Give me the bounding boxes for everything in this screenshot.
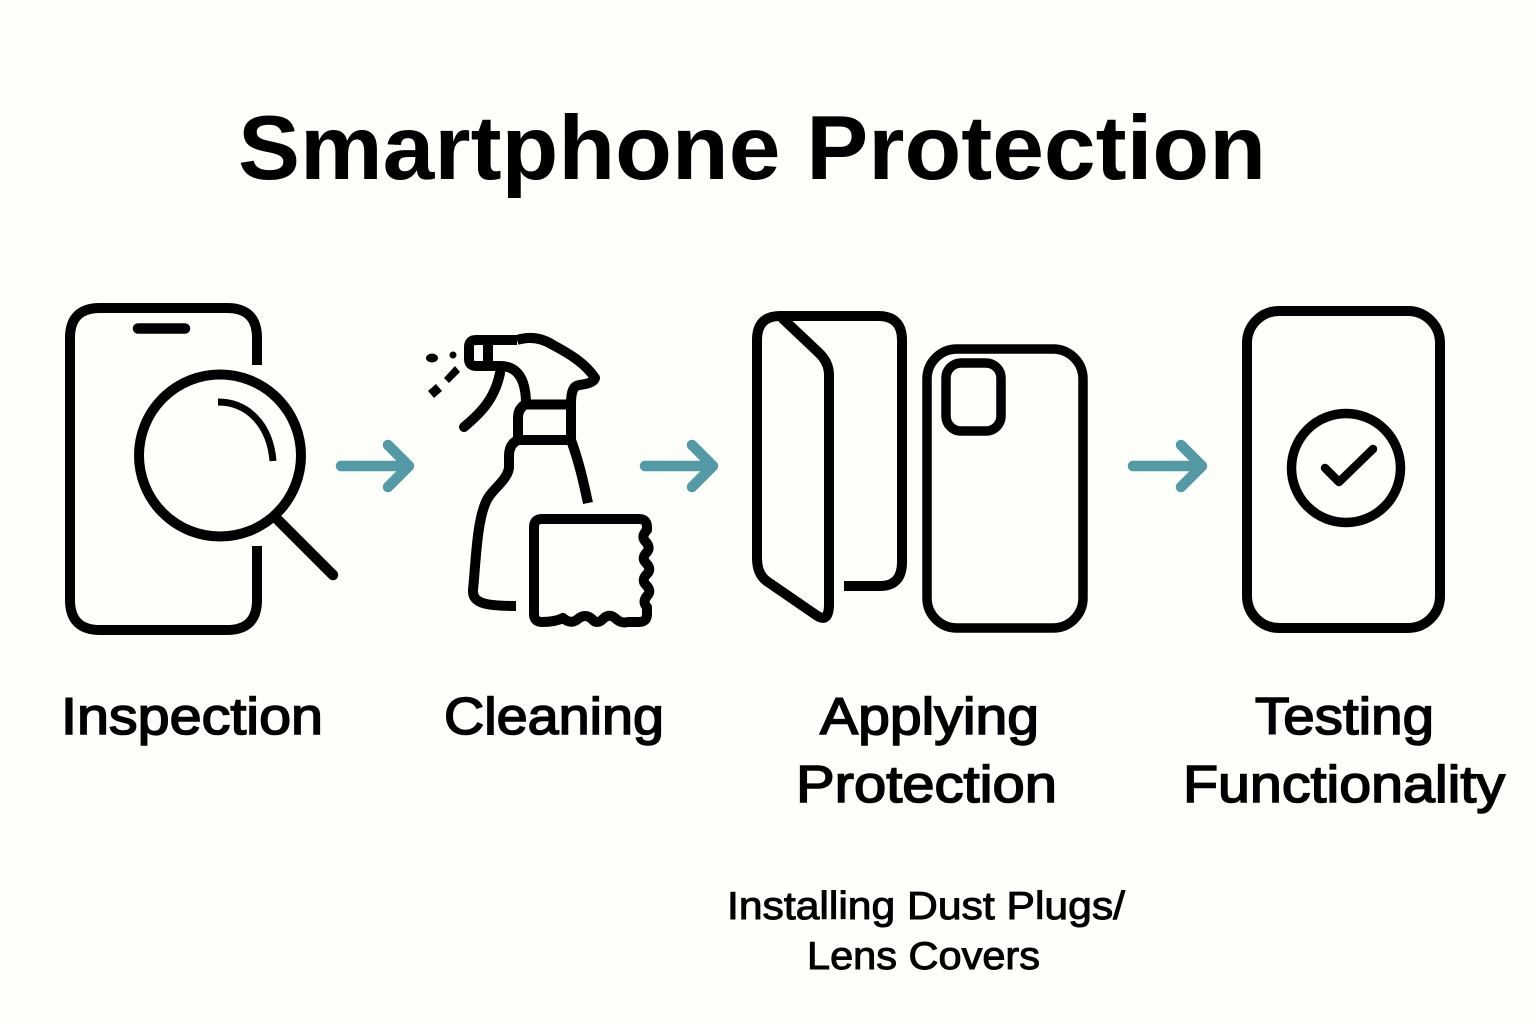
label: inspection: Inspection	[61, 688, 323, 746]
icon: phone with check mark (testing)	[1247, 311, 1440, 628]
label: testing functionality: Functionality	[1183, 756, 1505, 814]
label: testing functionality	[1183, 688, 1505, 814]
label: applying protection	[796, 688, 1057, 814]
title: Smartphone Protection	[238, 98, 1266, 199]
label: applying protection: Protection	[796, 756, 1057, 814]
label: applying protection: Applying	[820, 688, 1039, 746]
icon: spray bottle and cloth (cleaning)	[426, 338, 649, 622]
icon: phone with magnifying glass (inspection)	[70, 308, 333, 630]
label: cleaning: Cleaning	[444, 688, 664, 746]
arrow: applying protection to testing	[1133, 445, 1202, 487]
label: testing functionality: Testing	[1255, 688, 1434, 746]
icon: folio cover and phone case (applying protection)	[757, 316, 1083, 628]
text: installing dust plugs / lens covers: Lens Covers	[807, 935, 1040, 978]
icon: spray droplets	[426, 352, 460, 398]
text: installing dust plugs / lens covers: Installing Dust Plugs/	[727, 885, 1125, 928]
arrow: cleaning to applying protection	[645, 445, 713, 487]
arrow: inspection to cleaning	[341, 445, 409, 487]
text: installing dust plugs / lens covers	[727, 885, 1125, 978]
